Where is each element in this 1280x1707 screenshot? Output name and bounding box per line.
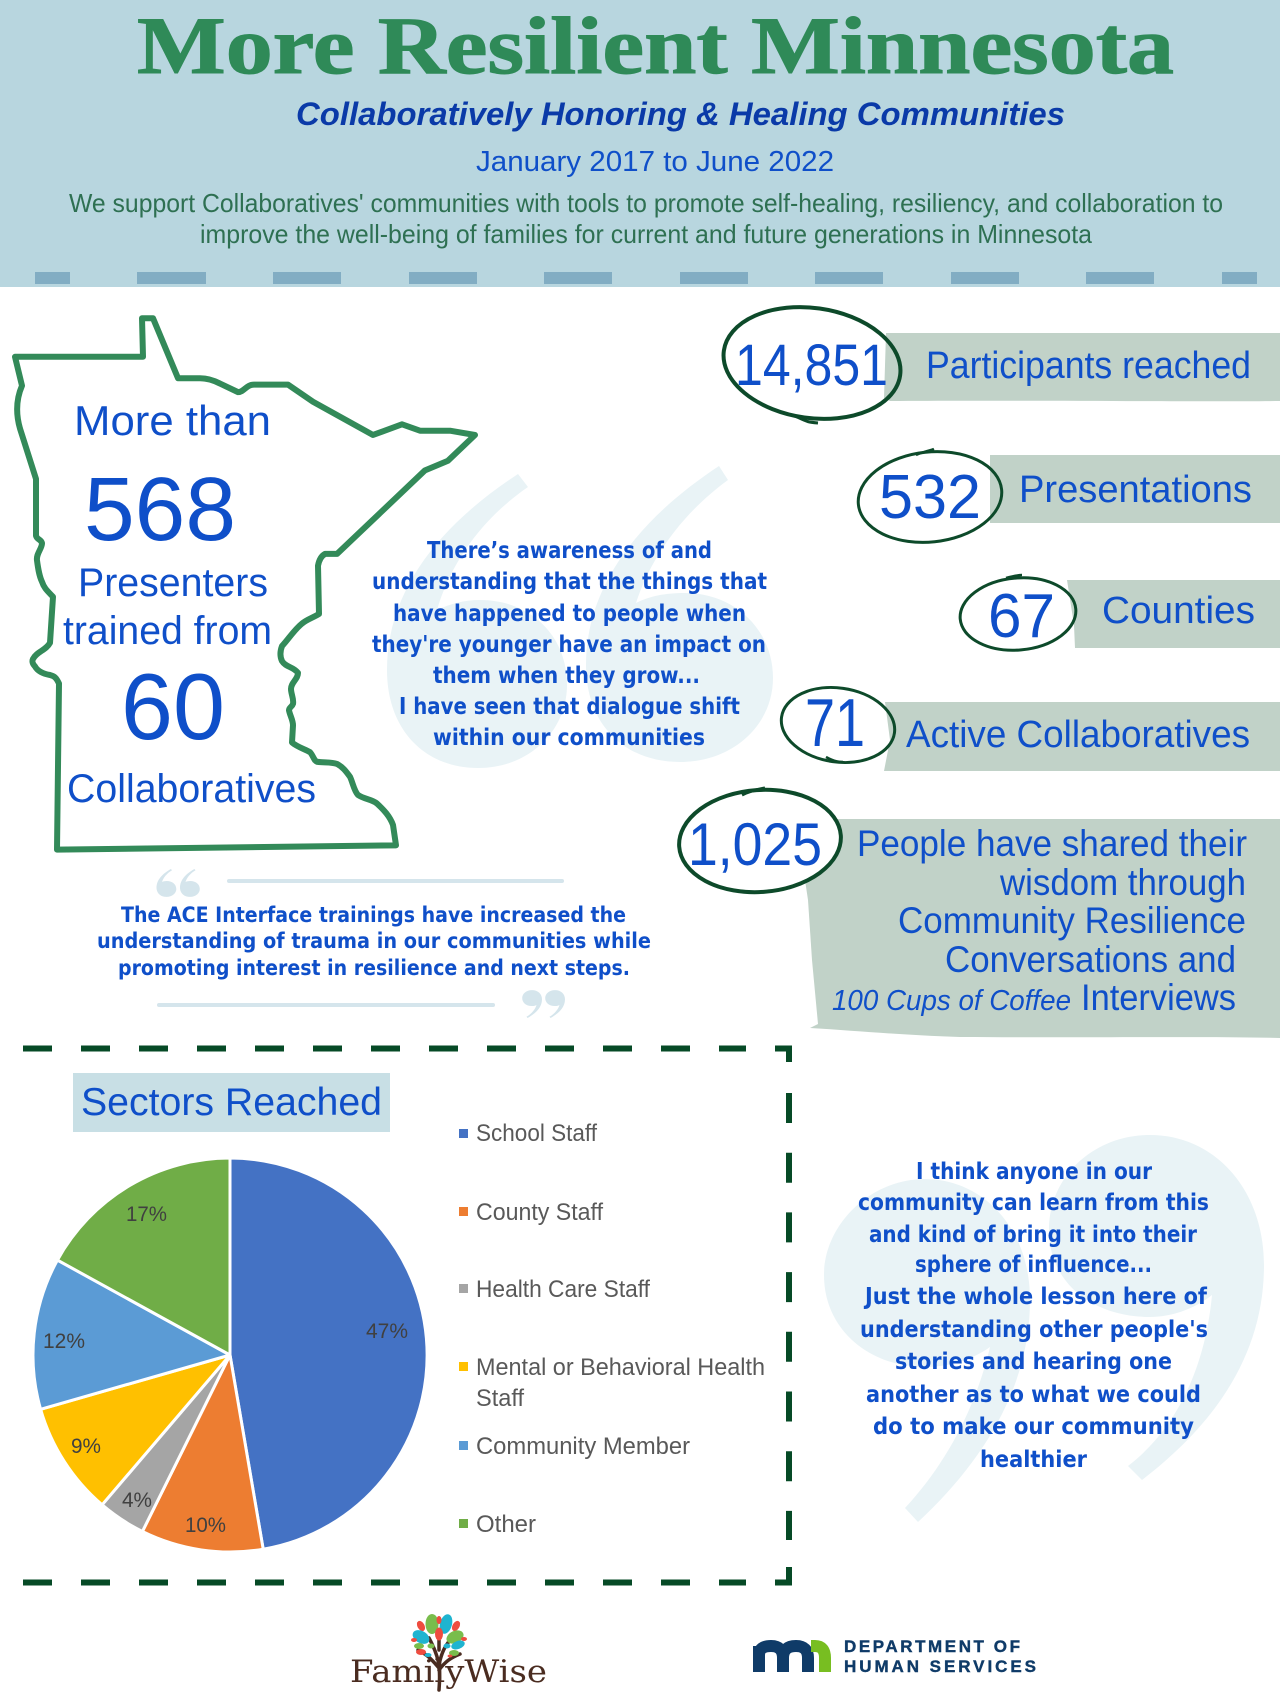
legend bbox=[459, 1120, 765, 1538]
stat: active collaboratives bbox=[776, 680, 1280, 771]
heading: sectors reached bbox=[73, 1073, 390, 1132]
panel: header bbox=[0, 0, 1280, 287]
quote: awareness: they're younger have an impact on bbox=[372, 632, 766, 658]
stat: participants reached bbox=[716, 296, 1280, 430]
stat: people shared wisdom: 100 Cups of Coffee bbox=[832, 985, 1071, 1017]
pie labels: 47% bbox=[366, 1320, 408, 1343]
stat: presentations bbox=[854, 445, 1280, 549]
subtitle: Collaboratively Honoring & Healing Communities bbox=[296, 96, 1065, 132]
date range: January 2017 to June 2022 bbox=[476, 146, 834, 178]
logo: FamilyWise bbox=[350, 1613, 547, 1690]
quote: ACE Interface trainings bbox=[97, 869, 651, 1018]
quote: ACE Interface trainings: understanding of trauma in our communities while bbox=[97, 929, 651, 954]
legend: Mental or Behavioral Health bbox=[476, 1354, 765, 1381]
stat: presentations: 532 bbox=[879, 463, 981, 532]
quote: ACE Interface trainings: promoting interest in resilience and next steps. bbox=[118, 956, 630, 981]
quote: anyone in our community: healthier bbox=[980, 1447, 1088, 1473]
quote: ACE Interface trainings: The ACE Interface trainings have increased the bbox=[121, 903, 626, 928]
quote: anyone in our community: stories and hearing one bbox=[895, 1349, 1172, 1375]
quote: anyone in our community: community can learn from this bbox=[858, 1190, 1209, 1216]
description bbox=[69, 188, 1223, 249]
quote: awareness: within our communities bbox=[433, 725, 705, 751]
title: More Resilient Minnesota bbox=[137, 0, 1174, 91]
logo: MN Department of Human Services bbox=[759, 1637, 1036, 1676]
stat: counties: Counties bbox=[1102, 590, 1255, 632]
logo: MN Department of Human Services: HUMAN SERVICES bbox=[844, 1657, 1036, 1676]
icon: small opening quote bbox=[156, 869, 200, 897]
stat: people shared wisdom: People have shared their bbox=[857, 823, 1247, 864]
stat: active collaboratives: Active Collaboratives bbox=[906, 714, 1250, 756]
quote: anyone in our community: Just the whole lesson here of bbox=[863, 1284, 1208, 1310]
stat: participants reached: Participants reached bbox=[926, 345, 1251, 387]
quote: anyone in our community: I think anyone in our bbox=[916, 1159, 1153, 1185]
quote: awareness: them when they grow... bbox=[433, 663, 700, 689]
description: We support Collaboratives' communities with tools to promote self-healing, resiliency, and collaboration to bbox=[69, 188, 1223, 218]
quote: awareness: I have seen that dialogue shift bbox=[399, 694, 740, 720]
panel: sectors reached bbox=[23, 1048, 789, 1582]
stat: people shared wisdom: Interviews bbox=[1081, 977, 1236, 1018]
logo: MN Department of Human Services: DEPARTMENT OF bbox=[844, 1637, 1020, 1656]
quote: awareness bbox=[372, 538, 767, 751]
pie labels bbox=[43, 1203, 408, 1537]
quote: anyone in our community: another as to what we could bbox=[866, 1382, 1201, 1408]
heading: sectors reached: Sectors Reached bbox=[81, 1081, 382, 1124]
icon: large opening quotation mark bbox=[387, 466, 773, 768]
stat: people shared wisdom: Community Resilience bbox=[898, 900, 1246, 941]
stat: counties bbox=[957, 573, 1280, 655]
quote: awareness: understanding that the things that bbox=[372, 569, 767, 595]
map number: 568: 568 bbox=[84, 460, 236, 560]
icon: small closing quote bbox=[522, 990, 565, 1018]
stat: people shared wisdom: Conversations and bbox=[945, 939, 1236, 980]
stat: active collaboratives: 71 bbox=[805, 685, 865, 761]
map outline bbox=[15, 318, 475, 850]
pie chart bbox=[33, 1158, 427, 1552]
map text: more than: More than bbox=[74, 397, 271, 444]
pie labels: 4% bbox=[122, 1489, 152, 1512]
stat: people shared wisdom bbox=[676, 784, 1280, 1038]
legend: Staff bbox=[476, 1385, 524, 1412]
stat: presentations: Presentations bbox=[1019, 469, 1252, 511]
stat: participants reached: 14,851 bbox=[735, 333, 888, 398]
stat: people shared wisdom: 1,025 bbox=[688, 811, 822, 878]
quote: anyone in our community: understanding other people's bbox=[860, 1317, 1208, 1343]
stat: people shared wisdom: wisdom through bbox=[999, 862, 1246, 903]
icon: large closing quotation mark bbox=[824, 1135, 1264, 1522]
map text: presenters: Presenters bbox=[78, 561, 268, 605]
logo: FamilyWise: FamilyWise bbox=[350, 1654, 547, 1690]
stat: counties: 67 bbox=[988, 582, 1055, 651]
legend: School Staff bbox=[476, 1120, 597, 1147]
quote: awareness: have happened to people when bbox=[393, 601, 746, 627]
legend: Other bbox=[476, 1511, 536, 1538]
legend: Community Member bbox=[476, 1433, 690, 1460]
map number: 60: 60 bbox=[121, 654, 225, 759]
pie labels: 9% bbox=[71, 1435, 101, 1458]
quote: anyone in our community: do to make our community bbox=[873, 1414, 1194, 1440]
pie labels: 10% bbox=[185, 1514, 226, 1537]
legend: Health Care Staff bbox=[476, 1276, 650, 1303]
map text: collaboratives: Collaboratives bbox=[67, 767, 316, 811]
quote: anyone in our community: sphere of influence... bbox=[915, 1252, 1152, 1278]
quote: anyone in our community bbox=[858, 1159, 1209, 1473]
panel: Minnesota map bbox=[15, 318, 475, 850]
pie labels: 17% bbox=[126, 1203, 167, 1226]
map text: trained from: trained from bbox=[63, 609, 272, 653]
legend: County Staff bbox=[476, 1199, 603, 1226]
pie labels: 12% bbox=[43, 1330, 85, 1353]
description: improve the well-being of families for current and future generations in Minnesota bbox=[200, 219, 1093, 249]
quote: anyone in our community: and kind of bring it into their bbox=[869, 1222, 1198, 1248]
quote: awareness: There’s awareness of and bbox=[427, 538, 712, 564]
